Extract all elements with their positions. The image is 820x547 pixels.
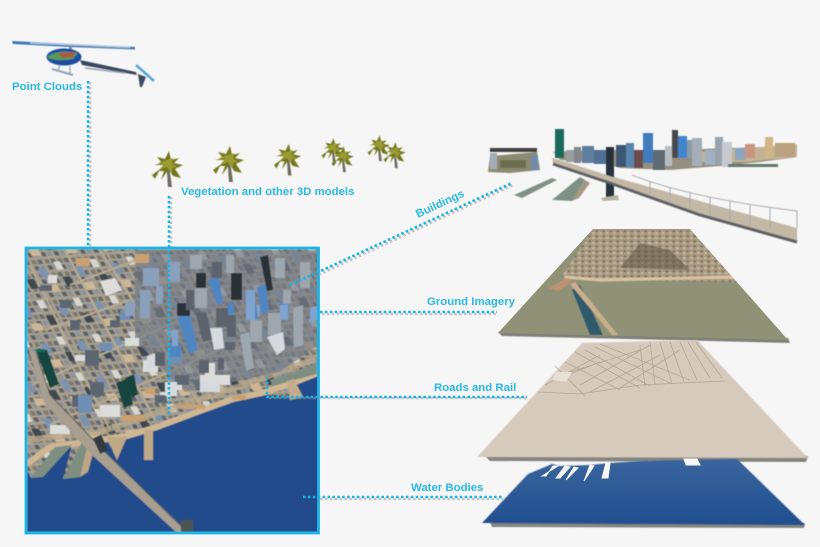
layer: roads and rail (477, 340, 808, 462)
label: Buildings: Buildings (414, 188, 466, 221)
connector: Water Bodies (303, 497, 503, 499)
panel frame (26, 248, 318, 533)
towers (125, 262, 260, 318)
icons: palm trees (152, 135, 406, 187)
connector: Buildings (290, 183, 513, 287)
green towers (36, 350, 138, 408)
low buildings (48, 275, 230, 434)
connector: Ground Imagery (320, 312, 498, 314)
piers (31, 445, 72, 478)
city aerial image (27, 249, 318, 532)
connector: Point Clouds (88, 81, 90, 247)
label: Ground Imagery: Ground Imagery (427, 296, 516, 308)
connector: Roads and Rail (267, 377, 527, 398)
layer: water bodies (482, 459, 805, 528)
label: Roads and Rail: Roads and Rail (434, 382, 516, 394)
label: Water Bodies: Water Bodies (411, 482, 483, 494)
skyline (488, 129, 797, 201)
bridge (29, 351, 188, 532)
bridge deck (552, 158, 797, 242)
layer: ground imagery (490, 225, 795, 345)
panel: composite city view (26, 248, 318, 533)
connector: Vegetation (169, 196, 171, 415)
icon: helicopter (12, 41, 154, 87)
layer: buildings and bridge (488, 129, 797, 242)
label: Vegetation: Vegetation and other 3D models (181, 186, 354, 198)
label: Point Clouds: Point Clouds (12, 81, 82, 93)
